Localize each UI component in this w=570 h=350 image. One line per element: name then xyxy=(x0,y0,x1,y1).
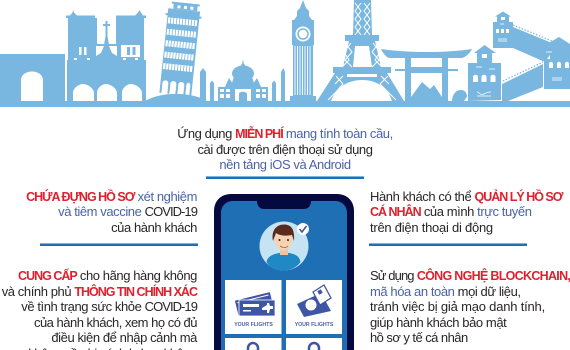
text block: provides information: và chính phủ THÔNG TIN CHÍNH XÁC xyxy=(2,284,197,299)
landmark: Eiffel Tower xyxy=(317,0,404,101)
text block: blockchain: giúp hành khách bảo mật xyxy=(370,315,506,330)
divider: intro xyxy=(206,176,364,179)
phone screen xyxy=(221,201,347,350)
text block: manage records: CÁ NHÂN của mình trực tuyến xyxy=(370,204,532,219)
landmark: Great Wall xyxy=(468,12,570,101)
phone frame xyxy=(214,194,354,350)
card label: YOUR FLIGHTS xyxy=(295,322,334,328)
landmark: torii gate with mountain xyxy=(381,49,472,101)
card label: YOUR FLIGHTS xyxy=(234,322,273,328)
phone xyxy=(214,194,354,350)
text block: blockchain: mã hóa an toàn mọi dữ liệu, xyxy=(370,284,521,299)
hill under Pisa xyxy=(145,94,201,101)
text block: provides information: về tình trạng sức khỏe COVID-19 xyxy=(21,299,197,314)
text block: app intro: nền tảng iOS và Android xyxy=(219,157,351,172)
landmark: Notre Dame xyxy=(66,10,146,101)
card: bottom right xyxy=(286,338,342,350)
skyline of world landmarks xyxy=(0,0,570,107)
card: flights passport xyxy=(286,280,342,334)
avatar xyxy=(260,222,308,270)
text block: app intro: Ứng dụng MIỄN PHÍ mang tính toàn cầu, xyxy=(177,126,393,141)
landmark: Big Ben xyxy=(290,0,316,101)
text block: records: CHỨA ĐỰNG HỒ SƠ xét nghiệm xyxy=(26,189,197,204)
text block: blockchain: Sử dụng CÔNG NGHỆ BLOCKCHAIN, xyxy=(370,268,570,283)
card: bottom left xyxy=(225,338,282,350)
text block: provides information: điều kiện để nhập cảnh mà xyxy=(51,330,197,345)
landmark: triumphal arch block xyxy=(0,54,65,101)
text block: provides information: CUNG CẤP cho hãng hàng không xyxy=(18,268,197,283)
card: flights tickets xyxy=(225,280,282,334)
text block: manage records: Hành khách có thể QUẢN LÝ HỒ SƠ xyxy=(370,189,562,204)
text block: blockchain: hồ sơ y tế cá nhân xyxy=(370,330,468,345)
text block: blockchain: tránh việc bị giả mạo danh tính, xyxy=(370,299,545,314)
check badge xyxy=(297,223,309,235)
text block: provides information: của hành khách, xem họ có đủ xyxy=(34,315,197,330)
ground band xyxy=(0,101,570,107)
text block: records: và tiêm vaccine COVID-19 xyxy=(58,204,197,219)
text block: manage records: trên điện thoại di động xyxy=(370,220,493,235)
landmark: Taj Mahal xyxy=(200,60,285,101)
text block: records: của hành khách xyxy=(111,220,197,235)
divider: left xyxy=(40,243,198,246)
landmark: Leaning Tower of Pisa xyxy=(157,1,203,97)
text block: app intro: cài được trên điện thoại sử dụng xyxy=(197,142,373,157)
divider: right xyxy=(369,243,527,246)
